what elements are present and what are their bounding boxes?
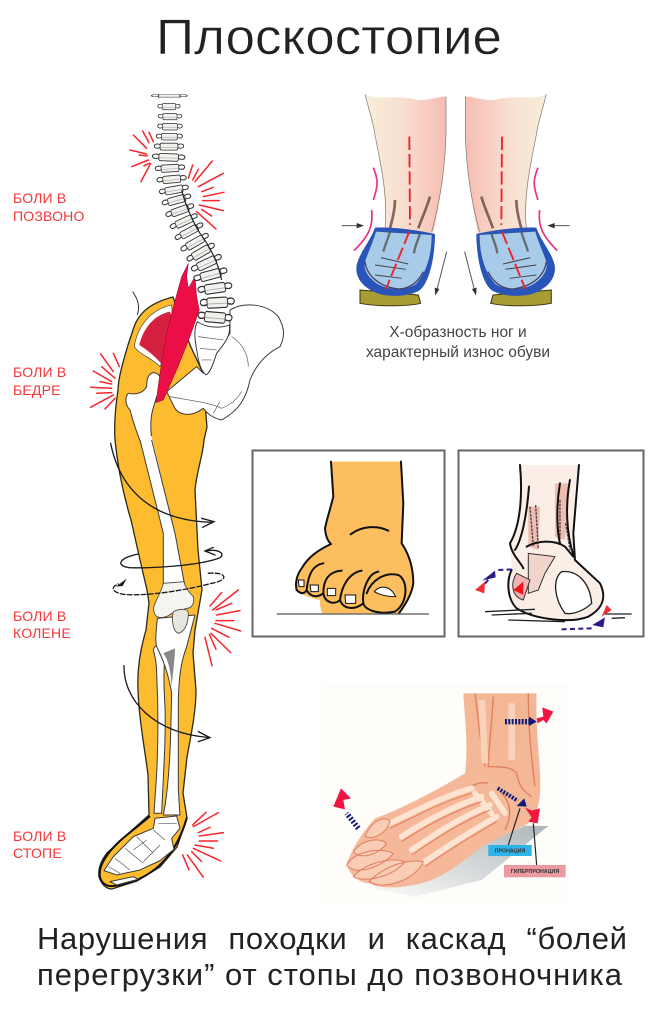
bottom caption: перегрузки” от стопы до позвоночника (37, 957, 623, 992)
gluteus muscle (139, 312, 173, 365)
panel: flat foot front view (252, 450, 444, 636)
rotation arrow: shin (124, 666, 210, 742)
toes (347, 819, 423, 885)
label: pronation: ПРОНАЦИЯ (495, 849, 525, 855)
pain burst: back (188, 161, 224, 229)
foot body (347, 693, 540, 887)
illustration: X-shaped legs and worn shoes (342, 94, 570, 306)
title: Плоскостопие (156, 9, 502, 65)
label: pronation (488, 845, 532, 856)
floor line (277, 612, 429, 616)
floor shadow (372, 826, 548, 897)
hip and upper femur skeleton (91, 94, 284, 442)
pelvis (167, 305, 284, 420)
leg silhouette (99, 297, 207, 889)
caption: X-shaped legs: Х-образность ног и (389, 324, 527, 341)
lower leg skeleton, arrows, pain bursts (100, 436, 241, 886)
background tint (322, 685, 568, 902)
calcaneus (556, 572, 592, 614)
arrows (513, 582, 523, 595)
label: hyperpronation (504, 865, 566, 877)
patella (172, 609, 188, 633)
tibia (156, 615, 195, 815)
toes (297, 563, 405, 613)
foot outline and bones (100, 817, 187, 886)
iliac crest hook (133, 292, 139, 315)
rotation spiral: solid (121, 547, 222, 568)
label: hyperpronation: ГИПЕРПРОНАЦИЯ (511, 869, 559, 875)
femoral condyles (154, 582, 194, 618)
arrow: ankle (498, 788, 518, 801)
sacrum (195, 322, 230, 375)
fibula (153, 645, 166, 813)
rotation arrow: thigh (111, 443, 214, 527)
ankle and heel bones (508, 465, 604, 621)
label: hip pain: БЕДРЕ (13, 382, 61, 398)
label: knee pain: КОЛЕНЕ (13, 625, 71, 641)
arrow: shin (505, 714, 530, 730)
right leg and shoe (465, 94, 570, 306)
label: spine pain: БОЛИ В (13, 190, 66, 206)
label: foot pain: СТОПЕ (13, 845, 62, 861)
pain burst: knee (205, 590, 241, 666)
bottom caption: Нарушения походки и каскад “болей (37, 921, 627, 956)
left leg and shoe (342, 94, 447, 306)
label: hip pain: БОЛИ В (13, 364, 66, 380)
pain burst: hip (91, 353, 119, 409)
tendons and bones (475, 693, 535, 797)
gluteus outline (134, 305, 173, 367)
foot shape (295, 462, 413, 613)
pain burst: neck (130, 131, 153, 182)
spine (152, 94, 235, 324)
femur head (126, 373, 162, 442)
illustration: orange leg with skeleton and spine (91, 94, 284, 889)
panel: ankle rear view (458, 450, 644, 636)
label: knee pain: БОЛИ В (13, 608, 66, 624)
leader lines (508, 808, 537, 865)
ground hatching (485, 609, 632, 622)
pain burst: foot (183, 812, 223, 877)
femur shaft (139, 436, 185, 587)
label: spine pain: ПОЗВОНО (13, 208, 85, 224)
caption: X-shaped legs: характерный износ обуви (366, 344, 550, 361)
label: foot pain: БОЛИ В (13, 828, 66, 844)
rotation spiral: dashed (113, 573, 224, 595)
psoas muscle (156, 263, 199, 403)
arrow: toes up (347, 813, 358, 828)
illustration: foot bones and ligaments (322, 685, 568, 902)
